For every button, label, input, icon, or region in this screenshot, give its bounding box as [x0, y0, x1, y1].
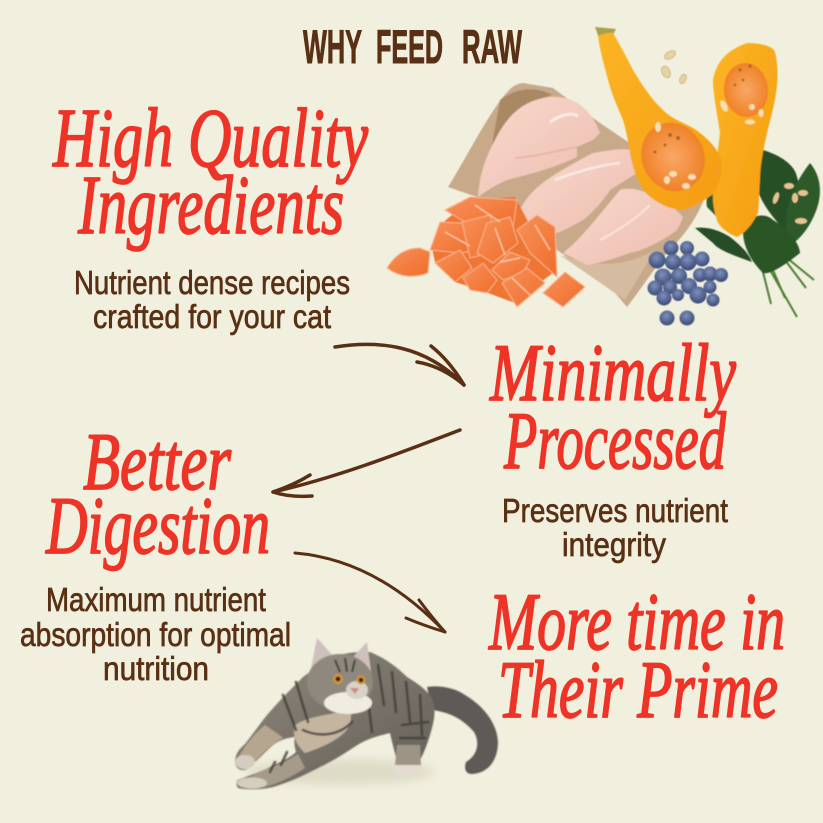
cat chest and legs [294, 708, 352, 753]
heading: Minimally Processed [489, 327, 736, 486]
loose seeds [660, 49, 688, 85]
heading: Better Digestion: Digestion [45, 480, 270, 571]
heading: High Quality Ingredients: High Quality [52, 92, 369, 185]
cat paws [235, 755, 255, 769]
salmon cubes [387, 197, 585, 307]
heading: High Quality Ingredients [52, 92, 369, 252]
title: WHY [303, 20, 362, 73]
arrow: to better digestion [273, 430, 460, 496]
text: nutrient dense: Nutrient dense recipes [74, 264, 350, 301]
butternut squash left [595, 27, 722, 210]
cat stripes [270, 665, 428, 772]
cat tail [427, 686, 498, 774]
heading: More time in Their Prime [488, 576, 785, 735]
illustration: tabby cat [235, 638, 498, 789]
chicken breast 1 [478, 97, 600, 197]
paper sheet [448, 83, 707, 307]
title [303, 20, 522, 73]
chicken breast 2 [520, 149, 637, 233]
text: nutrient dense: crafted for your cat [93, 298, 331, 335]
spinach bunch [695, 150, 820, 317]
text: maximum nutrient: Maximum nutrient [46, 581, 266, 618]
text: nutrient dense [74, 264, 350, 335]
text: maximum nutrient [20, 581, 291, 687]
text: preserves nutrient: Preserves nutrient [502, 492, 728, 529]
cat body [235, 652, 434, 789]
chicken breast 3 [563, 189, 683, 265]
text: maximum nutrient: absorption for optimal [20, 616, 291, 653]
title: RAW [462, 20, 522, 73]
heading: Better Digestion [45, 416, 270, 571]
cat head [307, 638, 373, 714]
heading: Better Digestion: Better [83, 416, 232, 507]
butternut squash right [713, 43, 778, 237]
illustration: raw ingredients [387, 27, 820, 326]
heading: High Quality Ingredients: Ingredients [77, 159, 344, 252]
text: maximum nutrient: nutrition [103, 650, 209, 687]
heading: Minimally Processed: Minimally [489, 327, 736, 418]
text: preserves nutrient: integrity [562, 526, 666, 563]
text: preserves nutrient [502, 492, 728, 563]
title: FEED [376, 20, 443, 73]
arrow: to minimally processed [335, 344, 464, 385]
blueberries [648, 240, 728, 326]
arrow: to more time [295, 553, 445, 632]
